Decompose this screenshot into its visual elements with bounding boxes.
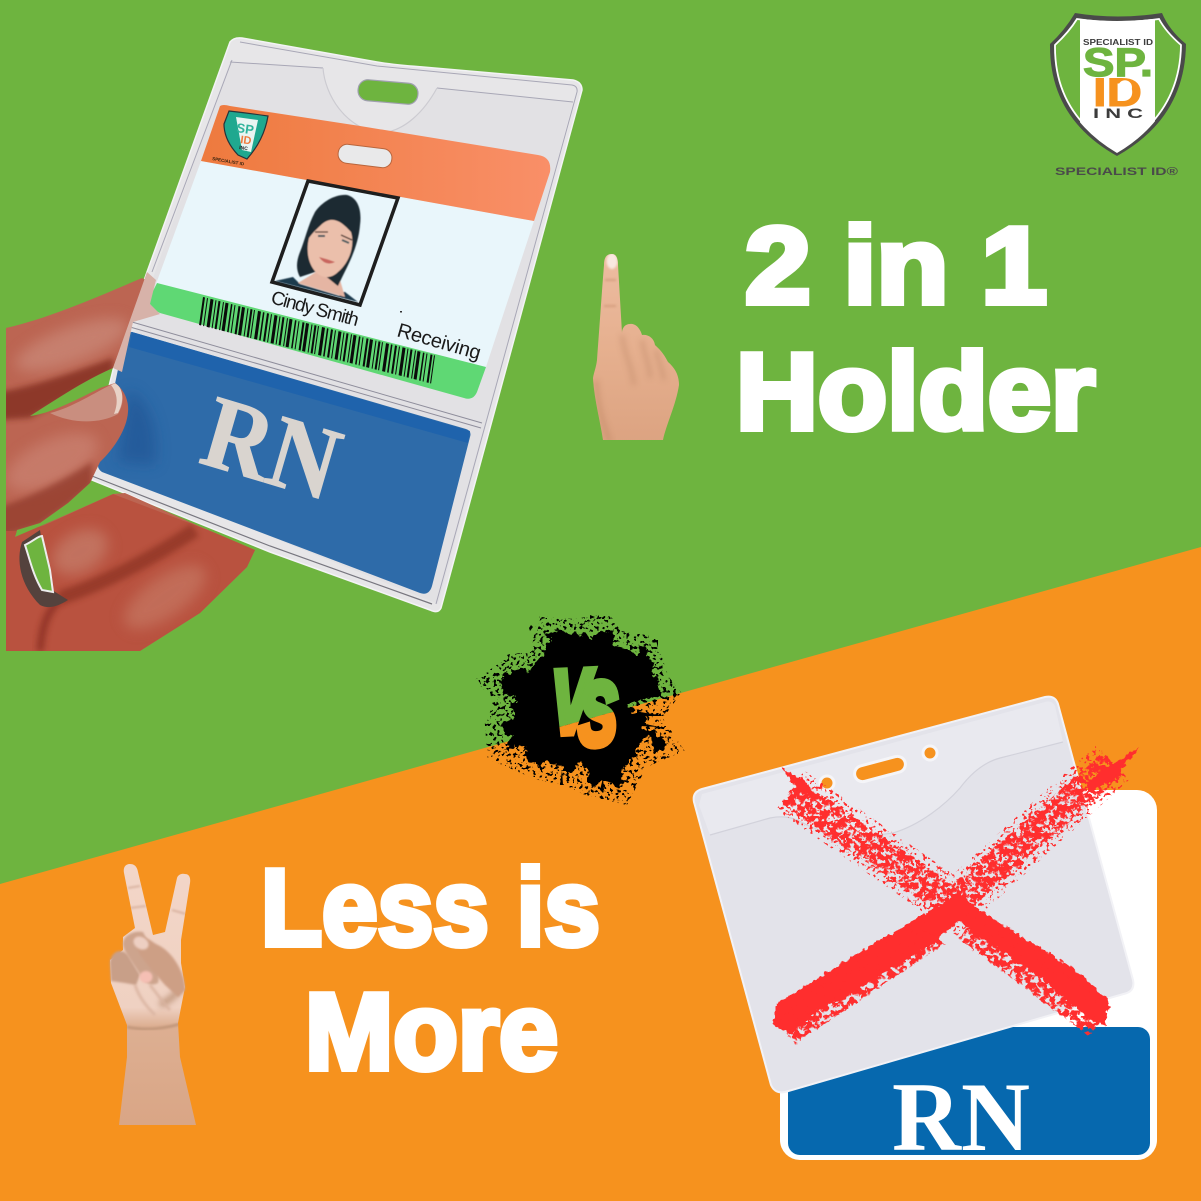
sparse spray, upper arms — [790, 762, 1113, 905]
palm crease shadow — [160, 985, 182, 1005]
VS lettering, orange part: V — [552, 651, 594, 752]
index finger highlight — [14, 316, 128, 374]
card dash mark — [400, 311, 402, 312]
ID card — [149, 105, 550, 399]
heading: 2 in 1 Holder: Holder — [736, 331, 1095, 453]
VS lettering, orange part — [559, 712, 616, 750]
middle fingertip — [140, 971, 152, 983]
logo caption: SPECIALIST ID® — [1055, 166, 1178, 178]
holder left hole — [820, 776, 834, 790]
logo: Specialist ID shield — [1050, 13, 1186, 178]
speckled lower-left edge — [785, 930, 935, 1030]
wrist crease — [127, 1024, 180, 1029]
pocket seam — [130, 322, 482, 428]
card mini logo: ID — [240, 134, 252, 148]
heading: Less is More: Less is — [261, 847, 600, 969]
holder strap slot — [357, 79, 419, 105]
holder pocket panels — [100, 62, 573, 604]
VS lettering, green part: V — [552, 651, 594, 752]
thumb nail — [131, 934, 151, 952]
thumb underside shadow — [6, 462, 94, 531]
speckled upper-left arm — [790, 792, 955, 905]
heading: Less is More: More — [305, 971, 558, 1093]
holder seams — [152, 42, 577, 604]
thumb highlight — [6, 432, 98, 492]
crease between lower fingers — [60, 530, 195, 598]
ring finger folded — [110, 951, 140, 985]
background: orange diagonal field — [0, 547, 1201, 1201]
speckled lower-right edge — [970, 925, 1100, 1022]
splat grunge edge — [495, 628, 665, 790]
finger joints — [128, 886, 186, 914]
holder right hole — [923, 746, 937, 760]
icon: one finger raised hand — [590, 250, 682, 442]
logo: Specialist ID shield: SP. — [1083, 41, 1153, 85]
bottom clear strip seam — [92, 476, 432, 604]
VS lettering, green part: S — [579, 663, 617, 764]
white RN badge behind plain holder — [780, 790, 1157, 1172]
heading: Less is More — [261, 847, 600, 1093]
middle finger folded — [123, 932, 159, 984]
card barcode — [201, 311, 433, 369]
VS lettering, green part — [553, 666, 620, 727]
card name: Cindy Smith — [269, 288, 361, 331]
holder flap cut-out curve — [323, 68, 437, 133]
thumb shadow on badge — [118, 390, 156, 465]
brush strokes, solid core — [772, 747, 1140, 1034]
holder slot — [853, 755, 907, 783]
logo: Specialist ID shield: ID — [1093, 71, 1142, 115]
logo white panel — [1080, 19, 1155, 153]
card green footer — [149, 283, 486, 399]
card mini logo: SP — [236, 120, 255, 137]
card slot — [337, 143, 393, 169]
card mini logo: SPECIALIST ID — [212, 156, 245, 167]
thumb — [133, 936, 185, 997]
card orange header — [201, 105, 550, 221]
badge lettering: RN — [191, 374, 352, 523]
plain clear holder, crossed out — [694, 697, 1133, 1092]
speckled upper-right arm — [955, 764, 1113, 902]
wedding ring — [19, 530, 68, 607]
splat flecks — [492, 615, 665, 790]
clear vinyl holder — [88, 38, 582, 612]
red X strike-through — [772, 747, 1140, 1034]
holder see-through corner over index finger — [113, 272, 160, 372]
VS splat badge — [492, 615, 665, 790]
splat core — [495, 628, 665, 790]
RN lettering: RN — [892, 1063, 1030, 1172]
logo head icon — [1118, 80, 1132, 97]
badge top dark strip — [129, 332, 470, 443]
icon: peace sign hand — [108, 864, 196, 1125]
card department: Receiving — [395, 320, 483, 365]
blue RN badge in lower pocket — [98, 332, 470, 594]
index finger shadow — [0, 358, 113, 420]
lower finger base — [0, 494, 260, 660]
holder top lip — [699, 702, 1063, 835]
card photo portrait — [272, 181, 398, 305]
thumb nail — [50, 383, 123, 421]
card white body — [149, 161, 534, 399]
card mini logo: INC — [239, 145, 248, 152]
heading: 2 in 1 Holder — [736, 205, 1095, 453]
photo: hand holding 2-in-1 badge holder — [0, 38, 582, 660]
blue RN strip — [788, 1027, 1150, 1155]
logo wordmark: SPECIALIST ID — [1083, 38, 1153, 47]
holder pocket seam — [710, 742, 1063, 835]
thumb nail tip — [111, 383, 122, 414]
hand — [6, 278, 255, 651]
logo: Specialist ID shield: I N C — [1093, 105, 1143, 121]
VS lettering, orange part: S — [579, 663, 617, 764]
heading: 2 in 1 Holder: 2 in 1 — [745, 205, 1047, 327]
card mini logo — [212, 111, 268, 167]
knuckle shading — [622, 335, 664, 385]
fingernail — [606, 253, 618, 269]
